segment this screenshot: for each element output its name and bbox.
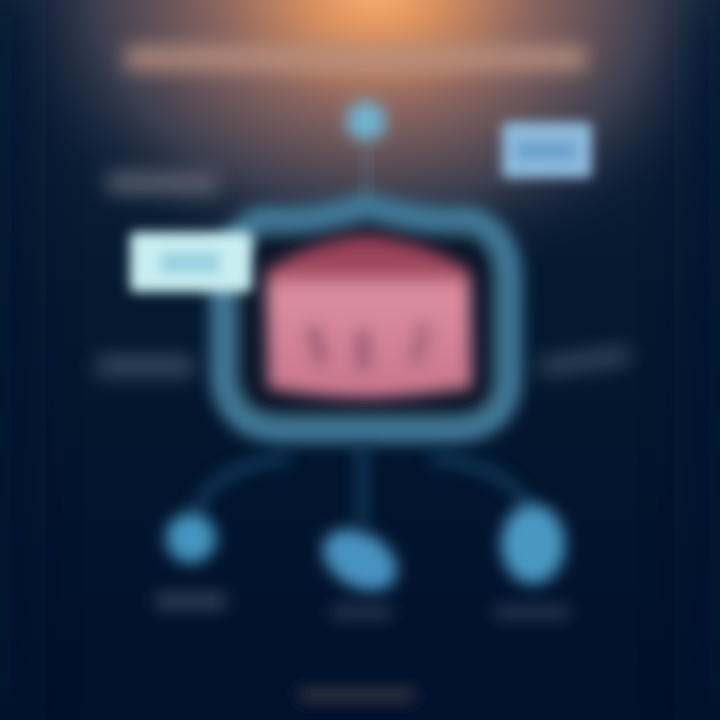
footer <box>298 688 416 702</box>
device: outer frame <box>222 204 510 431</box>
callout: left box <box>130 232 252 292</box>
icon: top circle <box>346 101 386 141</box>
device: screen <box>266 234 472 398</box>
callout: top right box <box>502 122 592 178</box>
connectors: device to bottom icons <box>195 445 528 525</box>
label: bottom left <box>155 592 227 610</box>
title <box>125 46 587 70</box>
label: bottom center <box>330 604 392 620</box>
label: middle right <box>537 346 631 376</box>
connector: top circle to device <box>361 145 371 200</box>
icon: bottom left <box>166 513 216 563</box>
label: middle left <box>96 356 194 376</box>
icon: bottom center <box>312 517 408 603</box>
label: upper left <box>106 173 218 193</box>
icon: bottom right <box>501 504 565 584</box>
label: bottom right <box>494 604 570 620</box>
